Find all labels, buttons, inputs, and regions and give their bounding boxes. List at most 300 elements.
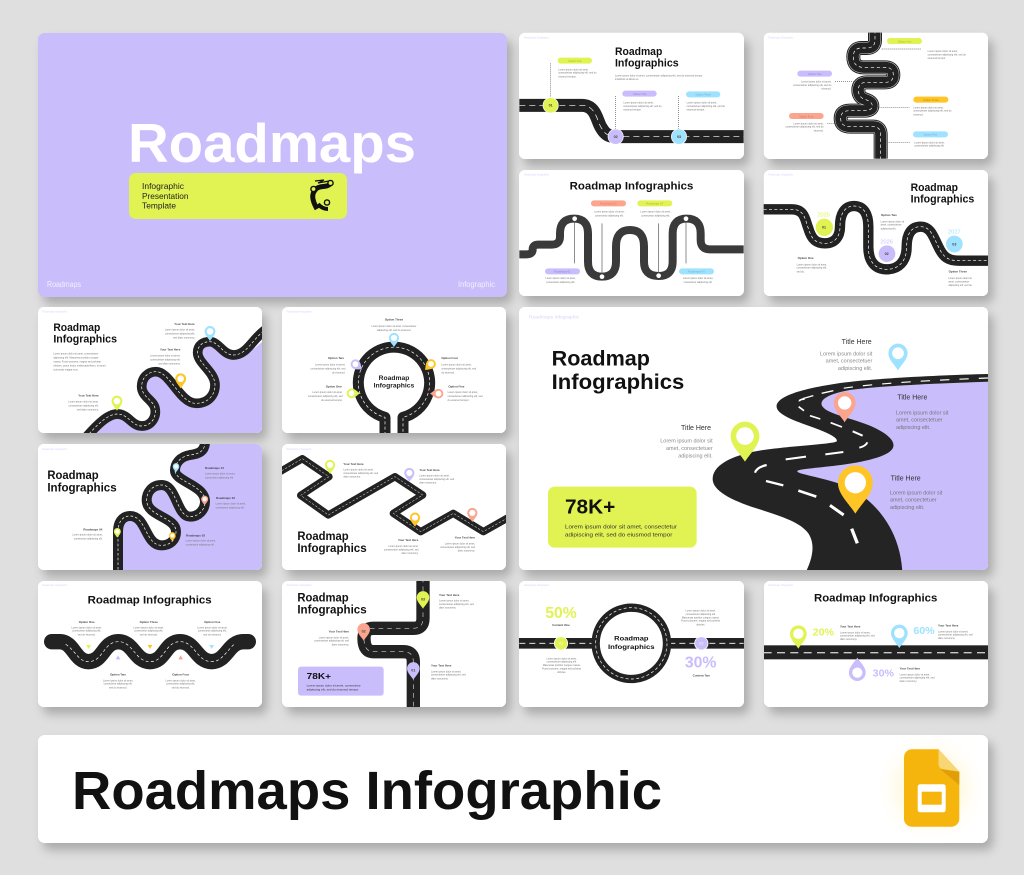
text block 1: Your Text Here [343, 462, 364, 466]
roadmaps 04: Roadmaps 04 [83, 527, 103, 531]
roadmap 03 [637, 200, 672, 217]
text: title here top: Lorem ipsum dolor sit [820, 351, 873, 357]
lorem right: Maecenas porttitor congue massa. [682, 616, 720, 619]
text: title here right: adipiscing elit. [896, 425, 931, 431]
roadmaps 04 [72, 527, 103, 541]
option four: sed do eiusmod. [172, 686, 190, 689]
text block 3: Your Text Here [431, 664, 452, 668]
text block 1: diam nonummy. [343, 476, 361, 479]
option two: Option Two [110, 673, 126, 677]
intro text: ultricies, purus lectus malesuada libero, sit amet [53, 365, 106, 368]
heading: Infographics [47, 481, 117, 494]
marker 02 [608, 129, 623, 144]
roadmaps 02: Lorem ipsum dolor sit amet, [216, 502, 246, 505]
connector lines [551, 63, 679, 130]
option four: Lorem ipsum dolor sit amet, [166, 679, 196, 682]
option two [103, 673, 133, 689]
option two: Lorem ipsum dolor sit amet, [315, 364, 346, 367]
marker 02 [357, 623, 370, 641]
text block 2: Your Text Here [160, 348, 181, 352]
panel: slide 9 wave road: Roadmaps Infographic [42, 584, 68, 587]
text block 2: consectetuer adipiscing elit, sed [938, 634, 973, 637]
panel: bottom title banner [38, 730, 989, 846]
option five: Option Five [924, 133, 938, 137]
marker 03: 03 [677, 135, 681, 139]
option three: Lorem ipsum dolor sit amet, consectetuer [371, 325, 417, 328]
road [118, 442, 205, 572]
lorem right: Lorem ipsum dolor sit amet, [686, 610, 716, 613]
pin orange [422, 357, 438, 373]
panel: slide 12 straight road with pins [764, 580, 988, 707]
heading: Roadmap Infographics [88, 595, 212, 607]
text: title here right: Lorem ipsum dolor sit [896, 410, 949, 416]
text block 3: diam nonummy. [431, 677, 449, 680]
lorem left: Maecenas porttitor congue massa. [543, 664, 581, 667]
roadmaps 03 [186, 534, 216, 547]
panel: slide 7 looping road on lilac: Roadmaps Infographic [42, 448, 68, 451]
intro text: incididunt ut labore et. [615, 78, 639, 81]
option four: consectetur adipiscing elit, [166, 683, 195, 686]
option two: Lorem ipsum dolor sit [881, 220, 904, 223]
callout: 78K+: adipiscing elit, sed do eiusmod tempor [565, 533, 672, 539]
option one [558, 58, 597, 78]
heading: Roadmap [297, 592, 349, 605]
panel: large perspective road slide: Roadmaps Infographic [529, 314, 580, 320]
stat 20%: 20% [813, 627, 834, 638]
panel: slide 4 winding timeline: Roadmaps Infographic [768, 174, 794, 177]
heading: Infographics [53, 333, 117, 345]
roadmap 03: Roadmaps 03 [646, 202, 663, 206]
text block 3: Lorem ipsum dolor sit amet, [68, 400, 99, 403]
option three: Option Three [696, 93, 712, 97]
text: title here left: Lorem ipsum dolor sit [660, 439, 713, 445]
marker 03 [671, 129, 687, 144]
text block 1: Lorem ipsum dolor sit amet, [343, 469, 374, 472]
panel: large perspective road slide [519, 307, 990, 572]
milestone 2027 [946, 229, 963, 252]
roadmap 04: Roadmaps 04 [688, 270, 705, 274]
text block 3 [900, 666, 935, 683]
text block 1: consectetuer adipiscing elit, [165, 333, 195, 336]
lorem left: ultricies. [557, 671, 566, 674]
text block 2: diam nonummy. [938, 637, 956, 640]
text: title here left: Title Here [681, 425, 711, 432]
callout: 78K+ [298, 667, 384, 696]
roadmaps 02: Roadmaps 02 [216, 496, 235, 500]
panel: slide 11 roundabout: Roadmaps Infographic [524, 584, 550, 587]
option one: Lorem ipsum dolor sit amet, [797, 263, 827, 266]
option five: Option Five [448, 384, 465, 388]
road dashes [755, 378, 988, 543]
marker 02: 02 [362, 629, 366, 633]
option one: Lorem ipsum dolor sit amet, [312, 391, 343, 394]
pin salmon [430, 389, 443, 398]
text: title here top: Title Here [842, 339, 872, 346]
option one: Lorem ipsum dolor sit amet, [558, 68, 589, 71]
option five [913, 131, 948, 148]
option one: Option One [898, 39, 912, 43]
roadmaps 01: Lorem ipsum dolor sit amet, [205, 472, 236, 475]
callout: 78K+ [548, 487, 697, 548]
text block 2: Lorem ipsum dolor sit amet, [938, 630, 969, 633]
text: title here lower: Lorem ipsum dolor sit [890, 490, 943, 496]
option one: Option One [326, 384, 342, 388]
roadmaps 01: Roadmaps 01 [205, 466, 224, 470]
pin lime [114, 528, 121, 538]
pin lime [790, 625, 807, 649]
ring road [358, 347, 430, 435]
option two: Lorem ipsum dolor sit amet, [623, 102, 654, 105]
option three [948, 270, 973, 287]
milestone 2025 [816, 213, 833, 236]
option two: Option Two [633, 92, 647, 96]
option five: consectetuer adipiscing elit, sed [448, 395, 483, 398]
option four: Lorem ipsum dolor sit amet, [441, 364, 472, 367]
option five: consectetuer adipiscing elit. [914, 145, 945, 148]
option three: consectetuer adipiscing elit, sed do [687, 105, 725, 108]
roadmap 02: Lorem ipsum dolor sit amet, [594, 210, 625, 213]
roadmap 02 [591, 200, 626, 217]
callout: template description: Presentation [142, 191, 189, 201]
stat 60%: 60% [913, 626, 935, 637]
text block 1: Lorem ipsum dolor sit amet, [439, 600, 470, 603]
pin lime [731, 422, 759, 462]
panel: slide 6 ring road: Roadmaps Infographic [287, 310, 312, 313]
ring title [374, 375, 415, 389]
pin blue [173, 463, 179, 472]
text: title here top: amet, consectetuer [826, 359, 872, 365]
stat 30%: Content Two [693, 673, 710, 677]
pin orange [175, 373, 186, 388]
option two [881, 213, 904, 230]
option four: consectetuer adipiscing elit, sed do [785, 126, 824, 129]
callout: template description: Template [142, 200, 176, 210]
panel: slide 2 vertical winding road [764, 30, 988, 162]
text block 2 [938, 624, 973, 640]
text: title here right [896, 394, 949, 431]
option four: Option Four [172, 673, 190, 677]
option four: consectetuer adipiscing elit, sed [441, 368, 477, 371]
callout: template description: Infographic [142, 181, 185, 191]
text block 1: Lorem ipsum dolor sit amet, [840, 631, 871, 634]
milestone lines and dots [572, 216, 688, 279]
roadmap 04: Lorem ipsum dolor sit amet, [683, 277, 713, 280]
marker 03 [417, 591, 429, 609]
intro text: massa. Fusce posuere, magna sed pulvinar [53, 361, 101, 364]
panel: slide 10 road with teardrop markers: Roadmaps Infographic [287, 584, 312, 587]
heading: Roadmap [47, 469, 99, 482]
text block 1: Your Text Here [439, 593, 460, 597]
center title: Infographics [608, 644, 655, 651]
pin orange [410, 512, 420, 527]
option three: Lorem ipsum dolor sit [948, 277, 972, 280]
heading [297, 592, 367, 617]
option two: consectetuer adipiscing elit, sed do [623, 105, 662, 108]
text block 3: Lorem ipsum dolor sit amet, [388, 545, 419, 548]
option two: consectetuer adipiscing elit, sed do [793, 84, 832, 87]
lorem left: Lorem ipsum dolor sit amet, [547, 657, 577, 660]
option four: Option Four [799, 114, 813, 118]
roadmap 03: consectetur adipiscing elit. [641, 214, 670, 217]
option two: consectetur adipiscing elit, [104, 683, 133, 686]
pin lime [347, 389, 360, 398]
marker 02: 02 [699, 642, 703, 646]
ring title: Roadmap [379, 375, 409, 382]
roadmaps 01: consectetur adipiscing elit. [205, 476, 234, 479]
panel: slide 5 diagonal road with lilac field [38, 307, 265, 437]
text block 4: Lorem ipsum dolor sit amet, [445, 543, 475, 546]
heading [53, 322, 117, 345]
text block 1: diam nonummy. [439, 607, 457, 610]
heading [297, 530, 367, 555]
intro text: Lorem ipsum dolor sit amet, consectetuer [53, 353, 99, 356]
text block 3 [431, 664, 466, 680]
marker 02 [695, 637, 708, 650]
option five: sed do eiusmod. [203, 633, 222, 636]
roadmaps 01 [205, 466, 236, 479]
roadmaps 03: Lorem ipsum dolor sit amet, [186, 540, 216, 543]
icon: winding road with pins [311, 180, 333, 209]
text: title here lower [890, 476, 943, 511]
option three: Lorem ipsum dolor sit amet, [134, 626, 164, 629]
milestone 2027: 03 [952, 242, 956, 246]
option three: Option Three [140, 620, 158, 624]
heading: Roadmap [911, 182, 958, 194]
text block 1: Your Text Here [840, 625, 861, 629]
pin lilac inverted [849, 658, 866, 681]
panel: slide 3 serpentine road [519, 174, 744, 284]
option two: amet, consectetuer [881, 224, 902, 227]
roadmap 04: consectetur adipiscing elit. [684, 281, 713, 284]
center title [608, 636, 655, 651]
text block 2: diam nonummy. [332, 643, 349, 646]
text block 3 [384, 538, 419, 555]
panel: slide 12 straight road with pins: Roadmaps Infographic [768, 584, 794, 587]
option one [72, 620, 102, 636]
lorem right: ultricies. [696, 623, 705, 626]
marker 01 [554, 637, 568, 650]
option three: adipiscing elit, sed do eiusmod. [377, 329, 411, 332]
option three: Option Three [949, 270, 967, 274]
text: title here top [820, 339, 873, 372]
roadmap 01 [545, 268, 580, 284]
marker 03: 03 [421, 598, 425, 602]
option one [796, 257, 827, 272]
road [364, 578, 423, 708]
option one: Option One [568, 59, 582, 63]
lorem right: consectetuer adipiscing elit. [686, 613, 716, 616]
option one [308, 384, 343, 402]
panel: slide 6 ring road [282, 307, 506, 435]
lorem left: Fusce posuere, magna sed pulvinar [542, 667, 581, 670]
marker 01 [543, 98, 558, 113]
callout: template description [129, 173, 347, 219]
text: title here lower: amet, consectetuer [890, 498, 937, 504]
option one [887, 38, 966, 60]
footer label left: Roadmaps [47, 280, 81, 289]
marker 02: 02 [614, 135, 618, 139]
panel: slide 11 roundabout [517, 580, 747, 707]
option four: eiusmod. [814, 129, 824, 132]
panel: slide 4 winding timeline [760, 170, 992, 296]
text: title here lower: adipiscing elit. [890, 505, 925, 511]
road [517, 105, 747, 137]
text block 2: diam nonummy. [419, 482, 437, 485]
road [841, 30, 893, 162]
option two: eiusmod. [821, 88, 832, 91]
callout: 78K+: 78K+ [565, 495, 615, 518]
text block 2: consectetuer adipiscing elit, sed [314, 640, 350, 643]
heading [47, 469, 117, 494]
panel: slide 5 diagonal road with lilac field: Roadmaps Infographic [42, 310, 68, 313]
marker 01: 01 [559, 642, 563, 646]
road [517, 219, 747, 277]
option one: Option One [798, 256, 814, 260]
text: title here right: Title Here [897, 394, 927, 401]
option one: Lorem ipsum dolor sit amet, [72, 626, 102, 629]
pin blue [891, 625, 908, 648]
text block 1: Your Text Here [174, 322, 195, 326]
stat 50%: 50% [545, 605, 577, 622]
roadmap 02: consectetur adipiscing elit. [595, 214, 624, 217]
pin blue [888, 344, 908, 370]
text block 1 [343, 462, 379, 479]
callout: 78K+: Lorem ipsum dolor sit amet, consectetur [565, 524, 677, 530]
panel: slide 2 vertical winding road: Roadmaps Infographic [768, 36, 794, 39]
heading: Roadmap [615, 46, 663, 58]
pin lime [112, 396, 122, 411]
straight road [517, 627, 747, 659]
option two: do eiusmod. [332, 372, 346, 375]
center title: Roadmap [614, 636, 648, 643]
option one: sed do eiusmod. [78, 633, 96, 636]
road [764, 645, 988, 659]
pin blue [205, 326, 215, 341]
option five: Lorem ipsum dolor sit amet, [448, 391, 478, 394]
text block 3 [68, 394, 99, 411]
panel: slide 1 two-bend road [519, 32, 744, 144]
roadmaps 04: consectetur adipiscing elit. [74, 538, 103, 541]
option one: consectetuer adipiscing elit, sed [308, 395, 343, 398]
text block 1: diam nonummy. [840, 638, 858, 641]
text: title here left: adipiscing elit. [678, 453, 713, 459]
text block 3: consectetuer adipiscing elit, sed [431, 674, 466, 677]
heading: Infographics [552, 369, 684, 394]
text block 1: consectetuer adipiscing elit, sed [439, 603, 474, 606]
roadmap 03: Lorem ipsum dolor sit amet, [641, 210, 671, 213]
heading: Roadmap [552, 346, 650, 371]
roadmap 01: consectetur adipiscing elit. [546, 281, 575, 284]
option one: consectetur adipiscing elit, [72, 630, 101, 633]
option four: do eiusmod. [441, 372, 455, 375]
option five: Lorem ipsum dolor sit amet, [914, 141, 945, 144]
text block 2 [150, 348, 181, 366]
option four [785, 113, 824, 132]
text block 3: consectetuer adipiscing elit, sed [384, 548, 419, 551]
pin blue [389, 333, 399, 347]
panel: slide 7 looping road on lilac [38, 442, 263, 572]
milestone 2026: 2026 [880, 239, 893, 245]
option five [448, 384, 483, 402]
text block 3: Your Text Here [398, 538, 419, 542]
option one: sed do. [797, 270, 805, 273]
option five: Lorem ipsum dolor sit amet, [197, 626, 228, 629]
option two: Option Two [328, 356, 344, 360]
option four: Option Four [441, 356, 459, 360]
option two: Lorem ipsum dolor sit amet, [103, 679, 133, 682]
callout: 78K+: Lorem ipsum dolor sit amet, consectetur [307, 684, 361, 688]
option two [793, 71, 832, 91]
heading: Infographics [911, 194, 974, 206]
text block 3: sed diam nonummy. [77, 408, 99, 411]
intro text [615, 74, 702, 80]
text block 4: Your Text Here [455, 536, 475, 540]
pin lilac [349, 357, 365, 373]
text block 3: Your Text Here [78, 394, 99, 398]
marker 01: 01 [411, 668, 415, 672]
callout: 78K+: 78K+ [307, 671, 331, 681]
option two: Lorem ipsum dolor sit amet, [801, 81, 832, 84]
option one: do eiusmod tempor. [321, 399, 343, 402]
option one: consectetuer adipiscing elit, sed do [558, 72, 597, 75]
text block 4 [440, 536, 476, 553]
roadmaps 03: consectetur adipiscing elit. [186, 544, 215, 547]
markers [86, 645, 214, 659]
option two [622, 91, 662, 112]
heading: Infographics [297, 604, 367, 617]
option three: eiusmod. [913, 113, 924, 116]
text block 1: consectetuer adipiscing elit, sed [343, 472, 379, 475]
lorem left [542, 657, 581, 674]
roadmap 02: Roadmaps 02 [600, 202, 617, 206]
stat 30%: 30% [873, 669, 894, 680]
callout: 78K+: adipiscing elit, sed do eiusmod tempor [307, 688, 358, 692]
ring title: Infographics [374, 382, 415, 389]
heading: Roadmap Infographics [570, 180, 693, 192]
roadmaps 03: Roadmaps 03 [186, 534, 205, 538]
text block 3: consectetuer adipiscing elit, sed [900, 677, 935, 680]
heading [911, 182, 974, 206]
option one: consectetuer adipiscing elit, sed do [928, 53, 966, 56]
option three [686, 91, 725, 112]
road [86, 330, 265, 437]
milestone 2026: 02 [885, 252, 889, 256]
option one: eiusmod tempor. [558, 75, 577, 78]
heading [615, 46, 679, 69]
connector lines [827, 49, 922, 142]
text: title here lower: Title Here [891, 476, 921, 483]
text block 3: Lorem ipsum dolor sit amet, [900, 673, 930, 676]
option four [441, 356, 477, 375]
text block 4: consectetuer adipiscing elit, sed [440, 546, 476, 549]
icon: Google Slides [904, 749, 959, 827]
option two: adipiscing elit. [881, 227, 896, 230]
title: Roadmaps: Roadmaps [128, 112, 416, 174]
option one: Lorem ipsum dolor sit amet, [928, 50, 958, 53]
text: title here top: adipiscing elit. [838, 366, 873, 372]
option two: sed do eiusmod. [109, 686, 127, 689]
text block 3: consectetuer adipiscing elit, [69, 404, 99, 407]
pin lilac [404, 468, 414, 482]
text: title here right: amet, consectetuer [896, 418, 943, 424]
option one: eiusmod tempor. [928, 57, 946, 60]
text block 2: Lorem ipsum dolor sit amet, [150, 355, 181, 358]
text block 1 [840, 625, 875, 641]
text block 2: consectetuer adipiscing elit, sed [419, 478, 455, 481]
panel: slide 9 wave road [38, 580, 262, 707]
heading: Infographics [615, 57, 679, 69]
roundabout [596, 608, 667, 679]
